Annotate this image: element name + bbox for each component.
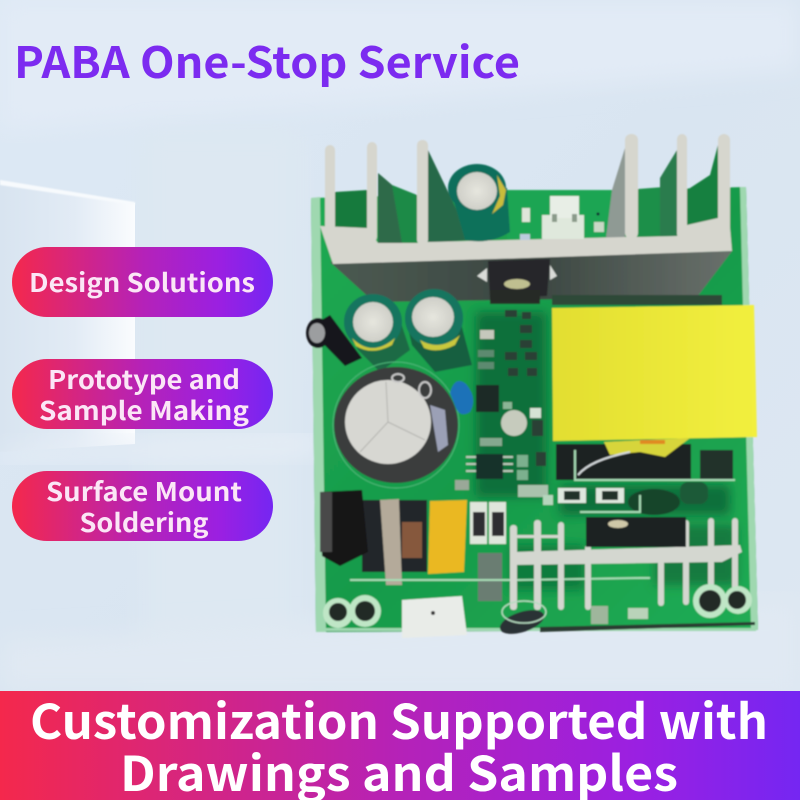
title: PABA One-Stop Service: [14, 29, 520, 91]
bottom banner: [0, 683, 800, 800]
pill: surface mount soldering: [12, 471, 273, 541]
capacitor pair: [344, 294, 410, 372]
toroid coil: [628, 489, 680, 515]
pill: design solutions: [12, 247, 273, 317]
transistor on heatsink: [477, 259, 557, 304]
relay chip: [478, 553, 502, 601]
capacitor dark small: [306, 315, 362, 366]
small smd: [628, 608, 648, 619]
bottom shadow edge: [540, 622, 755, 632]
mounting holes right: [693, 584, 752, 618]
ic chip mid: [466, 454, 513, 479]
solder row under heatsink: [552, 295, 722, 305]
test pad: [591, 606, 608, 624]
yellow x capacitor: [428, 500, 467, 574]
trace lines: [350, 450, 735, 580]
blue capacitor: [450, 381, 473, 414]
pill: prototype and sample making: Sample Making: [39, 391, 249, 428]
smd resistors row: [558, 488, 624, 503]
thermistor: [497, 601, 547, 639]
bridge rectifier: [586, 517, 686, 547]
circuit board base: [311, 187, 758, 632]
capacitor top: [448, 164, 510, 241]
connector bottom: [402, 596, 467, 638]
pill: prototype and sample making: Prototype and: [48, 360, 240, 397]
transformer bobbin and wires: [556, 438, 733, 480]
pill: design solutions: Design Solutions: [29, 263, 255, 300]
heatsink rear: [335, 145, 718, 243]
large capacitor: [333, 362, 459, 488]
solder traces lower right: [510, 518, 742, 610]
silver capacitor: [501, 410, 527, 436]
transformer yellow block: [552, 305, 757, 441]
smd components: [455, 310, 553, 505]
mounting holes left: [323, 595, 381, 628]
pill: surface mount soldering: Soldering: [80, 503, 208, 540]
board edge strip: [311, 187, 758, 632]
connector top: [542, 196, 584, 239]
board dark traces patch: [476, 312, 737, 590]
heatsink base and fins: [320, 134, 732, 264]
small parts top: [520, 208, 604, 240]
dark round part: [680, 482, 708, 504]
bottom banner: Customization Supported with: [30, 683, 768, 753]
heatsink underside: [330, 251, 732, 302]
ic chip upper: [476, 385, 499, 412]
photo: power supply circuit board: [306, 134, 758, 639]
common-mode choke: [320, 490, 427, 585]
ceramic resistors: [470, 502, 506, 544]
pill: prototype and sample making: [12, 359, 273, 429]
pill: surface mount soldering: Surface Mount: [46, 472, 242, 509]
